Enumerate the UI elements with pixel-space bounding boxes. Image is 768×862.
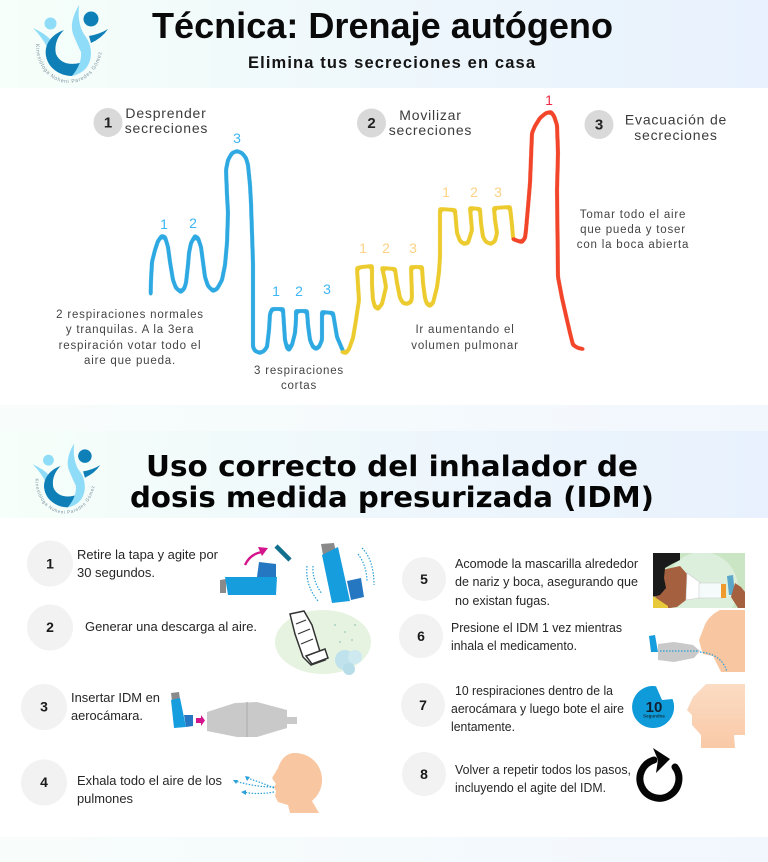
footer band [0,837,768,862]
step 4 text: pulmones [77,791,133,806]
curve count labels: yellow: 2 [382,240,390,256]
step 5 text: de nariz y boca, asegurando que [455,574,638,589]
description: cough: que pueda y toser [580,224,686,236]
subtitle: Elimina tus secreciones en casa [248,54,536,72]
step 7 text: lentamente. [451,719,515,734]
step 3 text: aerocámara. [71,708,143,723]
red breathing curve [513,112,583,349]
step 6 text: Presione el IDM 1 vez mientras [451,620,622,635]
description: short breaths: cortas [281,380,317,392]
curve count labels: blue: 1 [160,216,168,232]
title: Técnica: Drenaje autógeno [152,5,613,46]
step 1 number: 1 [46,556,54,572]
icon: repeat arrow [640,748,679,798]
description: short breaths: 3 respiraciones [254,365,344,377]
curve count labels: yellow: 1 [359,240,367,256]
curve count labels: blue: 2 [189,215,197,231]
step 8 number [402,752,446,796]
step 8 number: 8 [420,766,428,782]
step 5 number [402,557,446,601]
step badge 2: movilizar: 2 [367,115,376,132]
step 8 text: incluyendo el agite del IDM. [455,780,606,795]
logo top [33,5,108,83]
step 2 text: Generar una descarga al aire. [85,619,257,634]
curve count labels: blue [160,130,331,299]
step 8 text: Volver a repetir todos los pasos, [455,762,631,777]
label: evacuacion de secreciones: secreciones [634,127,718,143]
label: desprender secreciones: Desprender [125,105,207,121]
step 1 text: 30 segundos. [77,565,155,580]
icon: shaking inhaler [307,543,374,603]
curve count labels: yellow [359,184,502,256]
description: normal breaths: y tranquilas. A la 3era [66,324,194,336]
description: cough: con la boca abierta [577,239,689,251]
step 7 number [401,683,445,727]
step 6 number [399,614,443,658]
step 4 number: 4 [40,774,48,790]
label: movilizar secreciones: Movilizar [399,107,462,123]
curve count labels: blue: 3 [233,130,241,146]
step 1 number [27,540,73,586]
step 7 text: 10 respiraciones dentro de la [455,683,614,698]
step badge 3: evacuacion [584,110,614,139]
step 4 number [21,760,67,806]
label: desprender secreciones: secreciones [125,120,208,136]
second title: dosis medida presurizada (IDM) [130,481,654,514]
icon: child with mask [653,553,745,608]
step badge 2: movilizar [357,108,386,138]
icon: ten second timer: 10 [646,699,662,716]
curve count labels: blue: 2 [295,283,303,299]
icon: inhaler cap removal [220,546,290,595]
curve count label: red: 1 [545,92,553,108]
lower pale band [0,405,768,431]
logo second header [32,444,100,514]
icon: head exhaling slowly [687,684,745,748]
step 2 number: 2 [46,619,54,635]
label: evacuacion de secreciones: Evacuación de [625,112,727,128]
step badge 1: desprender [94,108,122,137]
logo top: Kinesióloga Noheni Paredes Gómez [36,44,102,83]
step 4 text: Exhala todo el aire de los [77,773,222,788]
top header band [0,0,768,88]
curve count labels: blue: 3 [323,281,331,297]
step 5 number: 5 [420,571,428,587]
step 5 text: no existan fugas. [455,593,550,608]
step badge 3: evacuacion: 3 [595,116,603,134]
description: normal breaths: aire que pueda. [84,355,176,367]
curve count labels: blue: 1 [272,283,280,299]
step 3 number [21,684,67,730]
description: increase volume: Ir aumentando el [415,324,515,336]
logo second header: Kinesióloga Noheni Paredes Gómez [35,478,94,514]
step 6 number: 6 [417,628,425,644]
description: normal breaths: respiración votar todo el [59,340,201,352]
curve count labels: yellow: 3 [409,240,417,256]
step 7 text: aerocámara y luego bote el aire [451,701,624,716]
step 2 number [27,604,73,650]
curve count labels: yellow: 1 [442,184,450,200]
description: cough: Tomar todo el aire [580,209,686,221]
second title: Uso correcto del inhalador de [146,450,638,483]
step 3 number: 3 [40,698,48,714]
step 5 text: Acomode la mascarilla alrededor [455,556,639,571]
icon: inhaling through chamber [649,610,745,672]
icon: exhaling head [233,753,322,813]
step 7 number: 7 [419,697,427,713]
blue breathing curve [151,151,343,353]
icon: ten second timer [632,686,674,728]
step badge 1: desprender: 1 [104,114,112,132]
description: normal breaths: 2 respiraciones normales [56,309,204,321]
step 3 text: Insertar IDM en [71,690,160,705]
step 1 text: Retire la tapa y agite por [77,547,219,562]
step 6 text: inhala el medicamento. [451,638,577,653]
curve count labels: yellow: 2 [470,184,478,200]
icon: spray discharge [275,610,371,675]
icon: inhaler into chamber [171,692,297,737]
label: movilizar secreciones: secreciones [389,122,472,138]
yellow breathing curve [342,207,514,353]
second header band [0,431,768,518]
description: increase volume: volumen pulmonar [411,340,519,352]
curve count labels: yellow: 3 [494,184,502,200]
icon: ten second timer: Segundos [643,714,665,718]
